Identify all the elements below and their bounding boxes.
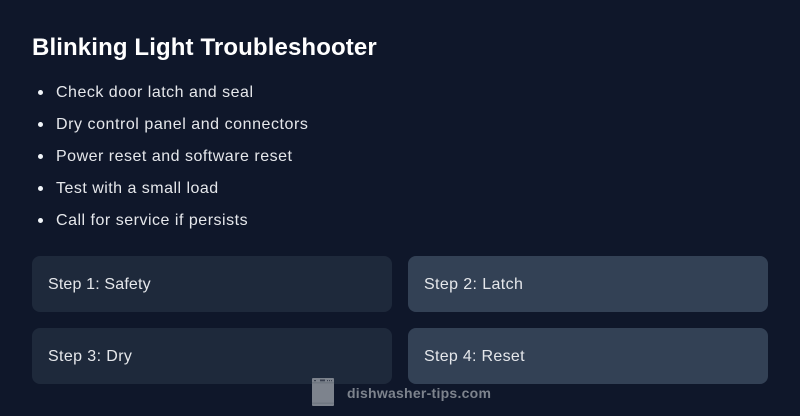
card: step 4: [408, 328, 768, 384]
card: step 1: Step 1: Safety: [48, 276, 151, 293]
card: step 4: Step 4: Reset: [424, 348, 525, 365]
bullet: door latch: Check door latch and seal: [56, 84, 254, 101]
bullet: service: Call for service if persists: [56, 212, 248, 229]
card: step 1: [32, 256, 392, 312]
card: step 3: Step 3: Dry: [48, 348, 132, 365]
card: step 2: Step 2: Latch: [424, 276, 523, 293]
title: Blinking Light Troubleshooter: [32, 34, 377, 61]
bullet list: [38, 84, 308, 229]
bullet: reset: Power reset and software reset: [56, 148, 292, 165]
card: step 2: [408, 256, 768, 312]
bullet: dry panel: Dry control panel and connectors: [56, 116, 308, 133]
icon: dishwasher: [312, 378, 334, 406]
card: step 3: [32, 328, 392, 384]
watermark text: dishwasher-tips.com: [347, 385, 491, 401]
bullet: test: Test with a small load: [56, 180, 219, 197]
